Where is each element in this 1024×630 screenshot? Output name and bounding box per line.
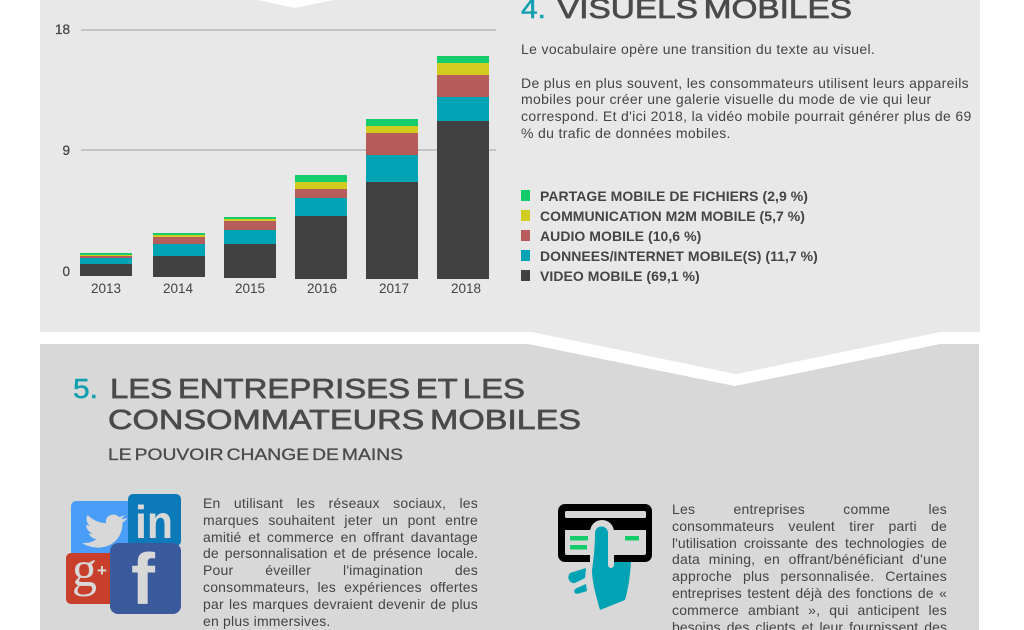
text: social media paragraph: amitié et commerce en offrant davantage — [203, 529, 478, 545]
text: social media paragraph: marques souhaitent jeter un pont entre — [203, 512, 478, 528]
bar 2017 — [366, 119, 418, 279]
y axis labels: 0 — [62, 264, 70, 279]
icon: social networks — [66, 494, 181, 620]
text: section 4 paragraph — [521, 74, 972, 141]
text: section 4 paragraph: % du trafic de données mobiles. — [521, 125, 731, 141]
legend: donnees internet mobiles: DONNEES/INTERNET MOBILE(S) (11,7 %) — [540, 248, 818, 264]
bar 2015 — [224, 217, 276, 278]
legend: audio mobile: AUDIO MOBILE (10,6 %) — [540, 228, 701, 244]
text: data mining paragraph: entreprises testent déjà des fonctions de « — [672, 585, 947, 601]
icon: linkedin: in — [135, 496, 173, 548]
panel: visuels mobiles — [40, 0, 980, 374]
stacked bar chart — [55, 22, 496, 296]
heading: 5. les entreprises et les consommateurs mobiles: LES ENTREPRISES ET LES — [110, 373, 525, 404]
legend: communication m2m mobile: COMMUNICATION M2M MOBILE (5,7 %) — [540, 208, 805, 224]
text: section 4 intro: Le vocabulaire opère une transition du texte au visuel. — [521, 41, 875, 57]
bar 2014 — [153, 233, 205, 277]
heading: 5. les entreprises et les consommateurs mobiles — [73, 373, 581, 435]
icon: google plus: g — [72, 541, 97, 597]
icon: facebook: f — [131, 540, 156, 620]
bar 2013 — [80, 253, 132, 276]
text: social media paragraph: En utilisant les réseaux sociaux, les — [203, 495, 478, 511]
text: data mining paragraph: approche plus personnalisée. Certaines — [672, 568, 947, 584]
heading: 5. les entreprises et les consommateurs mobiles: CONSOMMATEURS MOBILES — [108, 404, 581, 435]
text: data mining paragraph — [672, 501, 947, 630]
icon: google plus: + — [97, 561, 107, 580]
x axis labels: 2016 — [307, 281, 337, 296]
bar 2018 — [437, 56, 489, 279]
text: data mining paragraph: Les entreprises comme les — [672, 501, 947, 517]
small fingers — [568, 568, 586, 583]
heading: 5. les entreprises et les consommateurs mobiles: 5. — [73, 373, 98, 404]
text: social media paragraph — [203, 495, 478, 629]
text: social media paragraph: par les marques devraient devenir de plus — [203, 596, 478, 612]
y axis labels: 9 — [62, 143, 70, 158]
text: data mining paragraph: data mining, en offrant/bénéficiant d'une — [672, 551, 947, 567]
legend: partage mobile de fichiers: PARTAGE MOBILE DE FICHIERS (2,9 %) — [540, 188, 808, 204]
panel: entreprises et consommateurs — [40, 344, 979, 630]
x axis labels: 2013 — [91, 281, 121, 296]
legend: video mobile: VIDEO MOBILE (69,1 %) — [540, 268, 700, 284]
icon: card and hand — [558, 504, 652, 610]
text: section 4 paragraph: correspond. Et d'ici 2018, la vidéo mobile pourrait générer plus de 69 — [521, 108, 972, 124]
icon: google plus — [66, 541, 116, 604]
x axis labels — [91, 281, 481, 296]
y axis labels: 18 — [55, 22, 70, 37]
bar 2016 — [295, 175, 347, 279]
text: section 4 paragraph: mobiles pour créer une galerie visuelle du mode de vie qui leur — [521, 91, 932, 107]
text: data mining paragraph: consommateurs veulent tirer parti de — [672, 518, 947, 534]
finger outline — [590, 520, 614, 563]
x axis labels: 2017 — [379, 281, 409, 296]
text: social media paragraph: en plus immersives. — [203, 613, 331, 629]
icon: twitter — [71, 501, 133, 557]
x axis labels: 2018 — [451, 281, 481, 296]
x axis labels: 2015 — [235, 281, 265, 296]
text: social media paragraph: consommateurs, les expériences offertes — [203, 579, 478, 595]
text: social media paragraph: de personnalisation et de présence locale. — [203, 545, 478, 561]
text: section 4 paragraph: De plus en plus souvent, les consommateurs utilisent leurs appareils — [521, 74, 969, 90]
legend swatches — [521, 190, 530, 281]
y axis labels — [55, 22, 70, 279]
subheading: LE POUVOIR CHANGE DE MAINS — [108, 446, 403, 464]
text: data mining paragraph: commerce ambiant », qui anticipent les — [672, 602, 947, 618]
text: data mining paragraph: l'utilisation croissante des technologies de — [672, 535, 947, 551]
hand — [592, 526, 631, 610]
x axis labels: 2014 — [163, 281, 194, 296]
text: social media paragraph: Pour éveiller l'imagination des — [203, 562, 478, 578]
